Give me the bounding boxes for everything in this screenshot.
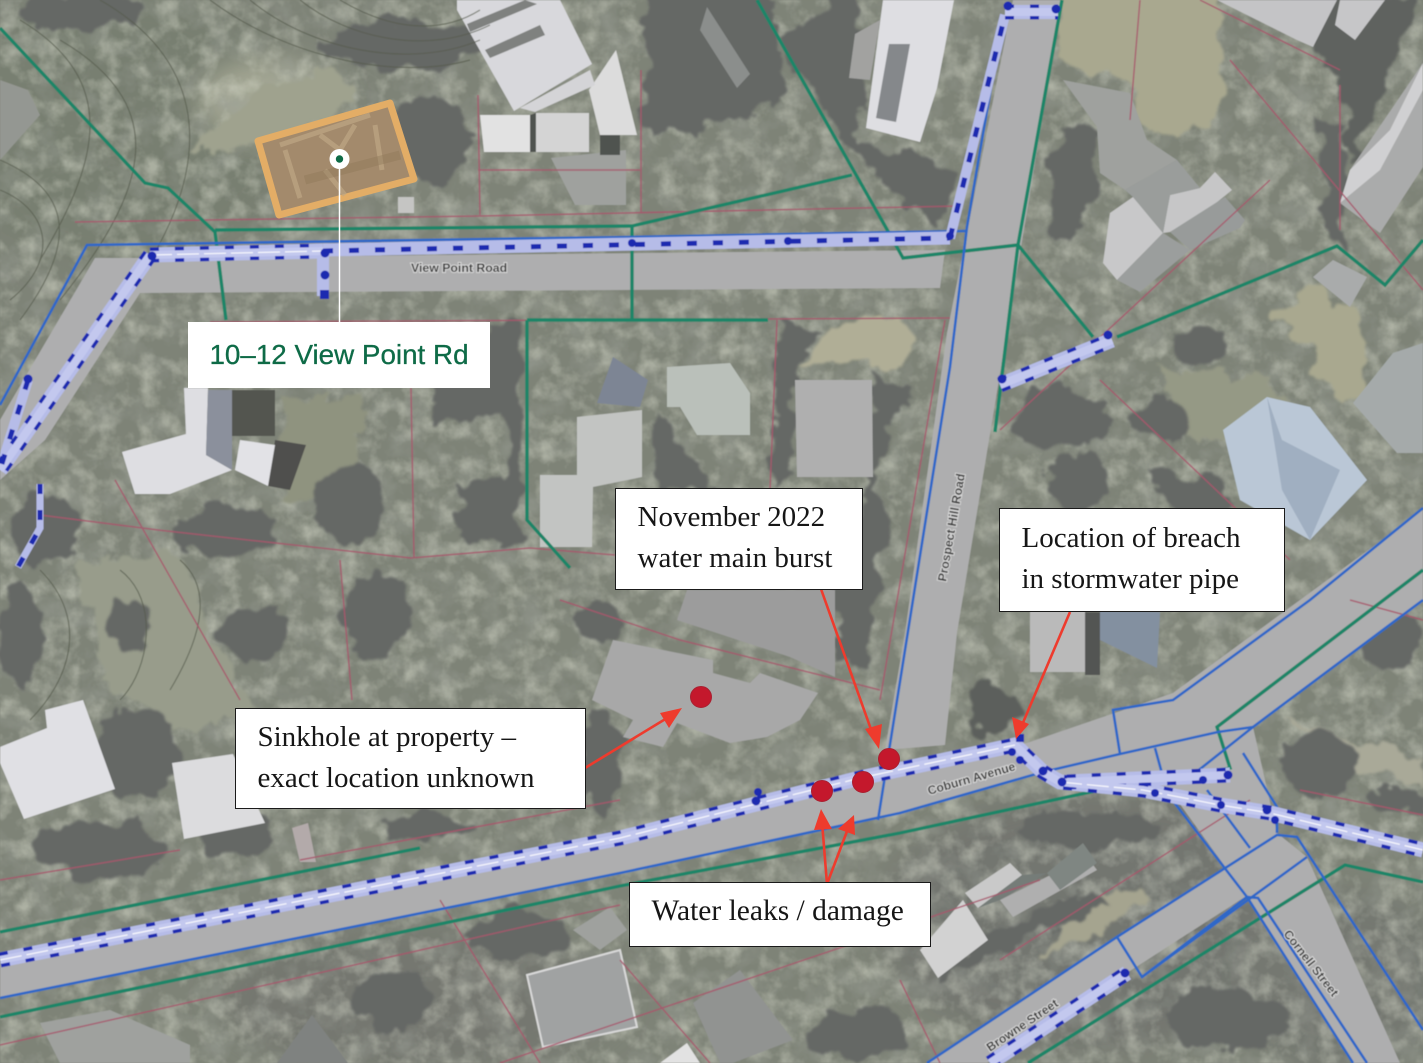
marker: sinkhole bbox=[690, 686, 712, 708]
building: top right roofs bbox=[1217, 0, 1385, 47]
lawn: lower left bbox=[75, 555, 258, 735]
lawn: lower right sand bbox=[1043, 887, 1153, 957]
building: left house bbox=[122, 388, 306, 494]
callout: location of breach bbox=[999, 508, 1285, 612]
callout: November 2022 water main burst bbox=[615, 488, 863, 590]
building: hillside roof bbox=[0, 80, 40, 160]
callout: November 2022 water main burst: November 2022 bbox=[638, 500, 825, 532]
verge: roadside sand bbox=[1283, 720, 1423, 787]
building: small right roof bbox=[1313, 260, 1367, 307]
arrow: breach bbox=[1012, 612, 1070, 739]
arrow: sinkhole bbox=[585, 708, 682, 768]
callout: sinkhole: exact location unknown bbox=[258, 762, 535, 794]
arrow: water main burst bbox=[821, 589, 882, 749]
lawn: hilltop yard bbox=[190, 70, 360, 150]
site outline: 10-12 View Point Rd bbox=[258, 103, 414, 215]
building: houses north of burst bbox=[540, 357, 873, 547]
lawn: top right bbox=[1060, 0, 1223, 140]
main centre highlights bbox=[0, 251, 1423, 960]
callout: sinkhole: Sinkhole at property – bbox=[258, 720, 516, 752]
building: near Coburn Avenue bbox=[1030, 610, 1160, 675]
marker: water main burst bbox=[878, 748, 900, 770]
single row dashes bbox=[0, 15, 1005, 567]
label: Cornell Street: Cornell Street bbox=[1281, 927, 1341, 999]
driveways bbox=[40, 80, 1177, 1063]
building: south of Coburn Avenue bbox=[527, 950, 793, 1063]
building: white roof with solar panels bbox=[849, 0, 954, 142]
building: lower right houses bbox=[920, 843, 1097, 978]
callout: water leaks: Water leaks / damage bbox=[652, 894, 904, 926]
callout: November 2022 water main burst: water main burst bbox=[638, 542, 832, 574]
site marker pin bbox=[330, 149, 350, 169]
building: blue roof house bbox=[1223, 397, 1367, 540]
red callout arrows bbox=[585, 589, 1070, 884]
callout: water leaks bbox=[629, 882, 931, 947]
callout: location of breach: in stormwater pipe bbox=[1022, 562, 1239, 594]
building: house right of Prospect Hill bbox=[1103, 160, 1245, 292]
building: narrow grey roof bbox=[700, 7, 750, 88]
callout: sinkhole bbox=[235, 708, 586, 809]
arrow: water leak right bbox=[827, 815, 855, 884]
road labels bbox=[411, 261, 1341, 1054]
lawn: right mid strip bbox=[1155, 370, 1300, 440]
marker: water leak 2 bbox=[812, 780, 832, 802]
label: 10-12 View Point Rd: 10–12 View Point Rd bbox=[209, 339, 469, 370]
contour lines bbox=[0, 0, 490, 720]
building: block beneath top bbox=[480, 50, 637, 155]
label: Browne Street: Browne Street bbox=[984, 996, 1061, 1054]
leader line from site marker to label bbox=[338, 165, 340, 322]
lawn: beside left house bbox=[285, 395, 370, 505]
label: View Point Road: View Point Road bbox=[411, 261, 507, 275]
label: 10-12 View Point Rd bbox=[188, 322, 490, 388]
building: solar-roof block top bbox=[457, 0, 592, 111]
label: Prospect Hill Road: Prospect Hill Road bbox=[935, 472, 968, 583]
building: right edge roof bbox=[1340, 63, 1423, 233]
building: roof under burst callout bbox=[677, 590, 835, 677]
label: Coburn Avenue: Coburn Avenue bbox=[926, 759, 1017, 798]
lawn: behind Prospect Hill house bbox=[797, 317, 917, 365]
callout: location of breach: Location of breach bbox=[1022, 522, 1241, 554]
arrow: water leak left bbox=[814, 809, 832, 884]
red incident markers bbox=[690, 686, 900, 802]
lawn: right middle bbox=[1270, 290, 1370, 410]
building: lower left white roofs bbox=[0, 700, 348, 1063]
marker: water leak 1 bbox=[852, 772, 874, 792]
building: sinkhole property bbox=[592, 640, 818, 747]
building: grey roof at right bbox=[1353, 343, 1423, 453]
